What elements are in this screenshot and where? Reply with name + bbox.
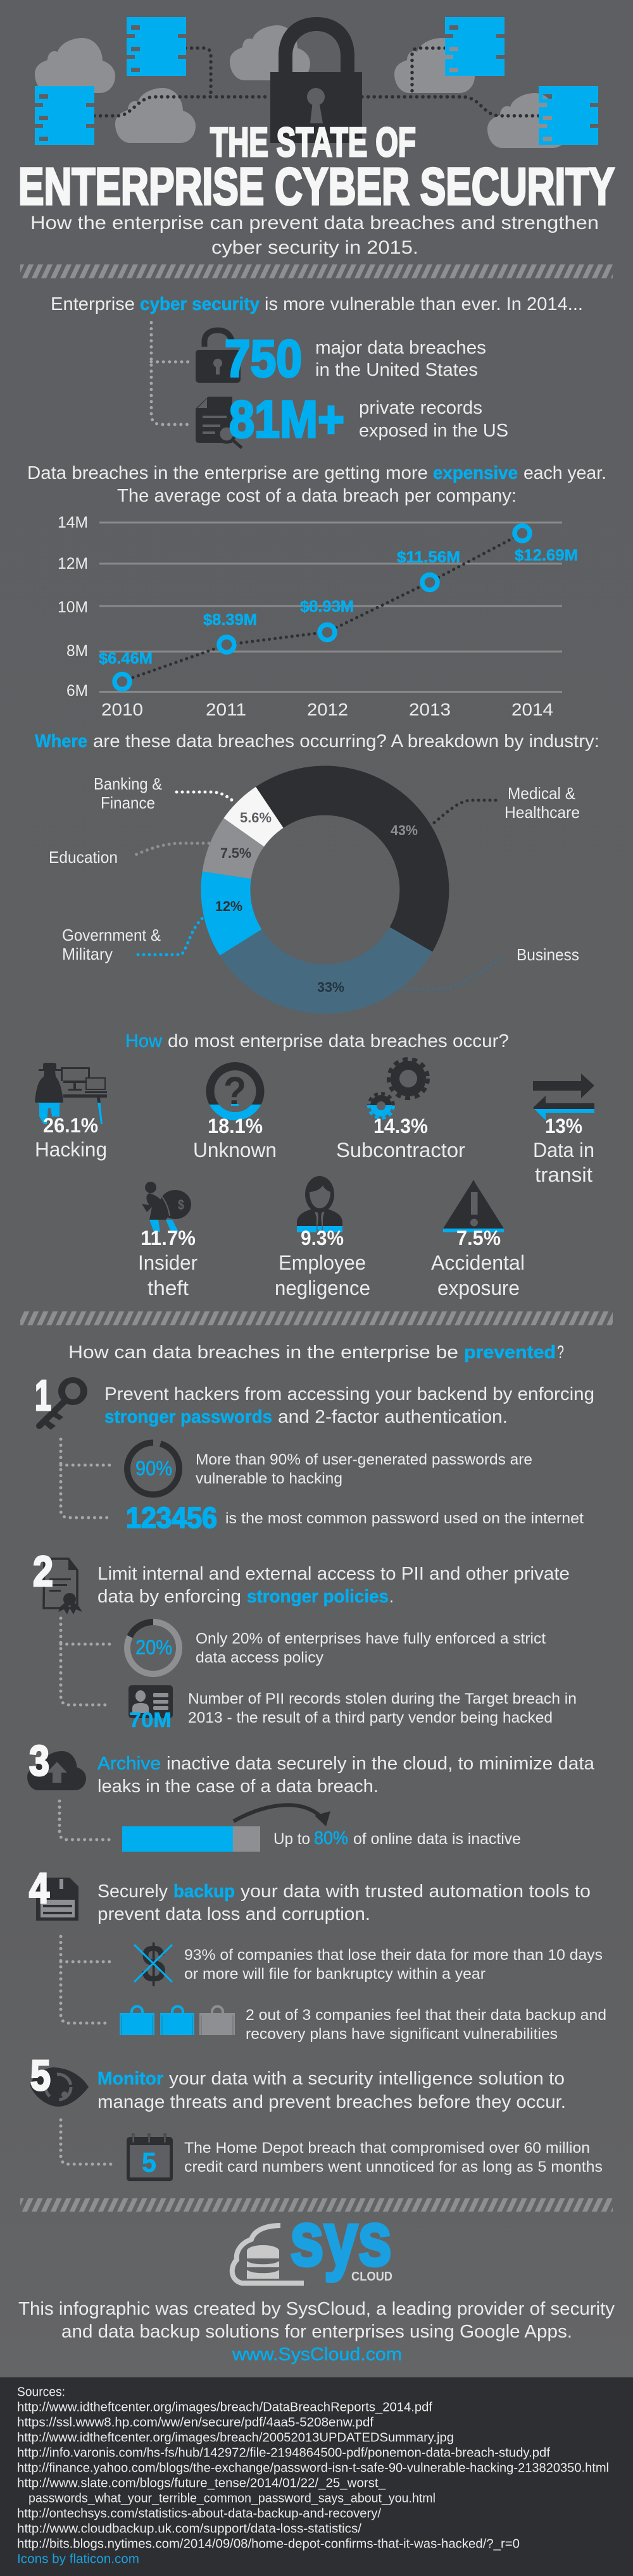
heading: expensive: Data breaches in the enterprise are getting more: [27, 463, 428, 483]
stat: 81M+ records: 81M+: [229, 390, 344, 449]
step number: 2: [33, 1547, 53, 1595]
footer panel: sources: https://ssl.www8.hp.com/ww/en/secure/pdf/4aa5-5208enw.pdf: [17, 2415, 373, 2429]
step 5: monitor: The Home Depot breach that compromised over 60 million: [184, 2139, 590, 2157]
breach type: accidental exposure: Accidental: [431, 1251, 525, 1274]
data line: [122, 533, 522, 681]
step 2: stronger policies: Limit internal and external access to PII and other private: [97, 1564, 570, 1584]
industry labels: Education: [49, 848, 118, 867]
breach type: subcontractor: 14.3%: [373, 1115, 428, 1137]
footer panel: sources: http://www.slate.com/blogs/future_tense/2014/01/22/_25_worst_: [17, 2476, 386, 2490]
step 1: stronger passwords: is the most common password used on the internet: [225, 1510, 584, 1527]
step 2: stronger policies: 2013 - the result of a third party vendor being hacked: [188, 1709, 553, 1726]
heading: vulnerable: cyber security: [140, 294, 260, 314]
step 3: archive: leaks in the case of a data breach.: [97, 1776, 379, 1797]
step number: 3: [29, 1737, 49, 1785]
credit text: and data backup solutions for enterprises using Google Apps.: [61, 2322, 572, 2342]
breach type: unknown: Unknown: [193, 1139, 277, 1161]
icon: two of three briefcases: [120, 2007, 235, 2035]
step 3: archive: inactive data securely in the cloud, to minimize data: [166, 1754, 595, 1774]
heading: vulnerable: is more vulnerable than ever. In 2014...: [265, 294, 583, 314]
icon: calendar: 5: [142, 2147, 156, 2178]
breach type: employee negligence: 9.3%: [301, 1227, 344, 1249]
icon: document with magnifier: [196, 397, 242, 448]
breach type: subcontractor: Subcontractor: [336, 1139, 465, 1161]
breach type: accidental exposure: 7.5%: [456, 1227, 501, 1249]
heading: prevented: prevented: [464, 1342, 556, 1363]
heading: vulnerable: [51, 294, 583, 314]
server racks: [35, 17, 598, 145]
title: [18, 119, 615, 216]
heading: expensive: [27, 463, 606, 506]
step 4: backup: 2 out of 3 companies feel that their data backup and: [246, 2007, 606, 2024]
footer panel: sources: http://www.cloudbackup.uk.com/support/data-loss-statistics/: [17, 2522, 361, 2536]
industry labels: [49, 774, 580, 964]
step 4: backup: your data with trusted automation tools to: [241, 1881, 591, 1902]
step 4: backup: 93% of companies that lose their data for more than 10 days: [184, 1947, 603, 1964]
icon: key: [39, 1377, 87, 1430]
y axis labels: 14M: [58, 514, 88, 531]
icon: open padlock: [196, 330, 241, 383]
icon: floppy disk: [36, 1878, 78, 1921]
x axis labels: [101, 700, 553, 719]
heading: expensive: expensive: [433, 463, 518, 483]
step 1: stronger passwords: stronger passwords: [104, 1407, 272, 1427]
x axis labels: 2010: [101, 700, 143, 719]
progress ring: 90%: [127, 1442, 179, 1494]
step 5: monitor: your data with a security intelligence solution to: [169, 2069, 565, 2089]
step 5: monitor: Monitor: [97, 2069, 163, 2089]
breach type: hacking: [35, 1063, 107, 1161]
industry labels: Business: [517, 945, 579, 964]
line chart: average cost of a breach: [58, 514, 578, 719]
icon: thief with money bag: $: [178, 1197, 184, 1213]
icon: crossed-out dollar: $: [141, 1934, 166, 1993]
dotted connector: [61, 1618, 113, 1705]
step 3: archive: of online data is inactive: [353, 1830, 521, 1848]
stat: 750 breaches: in the United States: [315, 360, 478, 380]
data points: [115, 526, 530, 690]
credit text: www.SysCloud.com: [232, 2344, 402, 2365]
icon: opposing arrows: [533, 1074, 594, 1120]
stat: 750 breaches: [196, 329, 486, 388]
heading: how: How: [125, 1031, 163, 1051]
y axis labels: 6M: [66, 682, 88, 700]
step 3: archive: 80%: [314, 1828, 348, 1848]
step 3: archive: Archive: [97, 1754, 161, 1774]
breach type: employee negligence: Employee: [279, 1251, 366, 1274]
icon: question mark ring: ?: [223, 1068, 246, 1115]
heading: prevented: ?: [557, 1342, 564, 1363]
step 1: stronger passwords: and 2-factor authentication.: [278, 1407, 508, 1427]
heading: expensive: each year.: [523, 463, 606, 483]
subtitle: [30, 213, 599, 258]
x axis labels: 2011: [206, 700, 246, 719]
progress ring: 20%: [127, 1622, 179, 1674]
step 2: stronger policies: [33, 1547, 577, 1731]
breach type: data in transit: 13%: [545, 1115, 582, 1137]
icon: cloud upload: [27, 1751, 86, 1790]
step 4: backup: or more will file for bankruptcy within a year: [184, 1966, 486, 1983]
icon: eye: [30, 2067, 89, 2107]
SysCloud logo: CLOUD: [351, 2270, 392, 2284]
step 2: stronger policies: stronger policies: [247, 1587, 389, 1607]
value labels: $6.46M: [99, 650, 153, 667]
percent labels: 33%: [317, 979, 344, 995]
breach type: employee negligence: negligence: [275, 1277, 370, 1299]
dotted connector: [61, 2120, 114, 2164]
y axis labels: [58, 514, 88, 700]
breach type: unknown: [193, 1062, 277, 1161]
x axis labels: 2014: [511, 700, 553, 719]
footer panel: sources: http://www.idtheftcenter.org/images/breach/20052013UPDATEDSummary.jpg: [17, 2430, 454, 2444]
breach type: accidental exposure: exposure: [437, 1277, 520, 1299]
breach type: data in transit: Data in: [533, 1139, 594, 1161]
icon: employee bust: [297, 1176, 342, 1232]
heading: expensive: The average cost of a data breach per company:: [117, 486, 517, 506]
icon: question mark ring: [206, 1062, 265, 1120]
dotted network connections: [94, 48, 539, 116]
SysCloud logo: [232, 2196, 392, 2284]
footer panel: sources: http://finance.yahoo.com/blogs/the-exchange/password-isn-t-safe-90-vulnerable-hacking-213820350.html: [17, 2461, 609, 2475]
footer panel: sources: Sources:: [17, 2385, 65, 2399]
breach type: hacking: Hacking: [35, 1138, 107, 1161]
step 2: stronger policies: 70M: [129, 1708, 172, 1731]
donut chart: breaches by industry: [49, 766, 580, 1013]
step 4: backup: [29, 1864, 606, 2043]
breach type: data in transit: transit: [535, 1163, 592, 1186]
step 2: stronger policies: Only 20% of enterprises have fully enforced a strict: [196, 1630, 546, 1647]
stat: 81M+ records: [196, 390, 508, 449]
subtitle: cyber security in 2015.: [211, 237, 418, 258]
step 1: stronger passwords: [35, 1372, 594, 1534]
step number: 4: [29, 1864, 49, 1912]
step number: 1: [35, 1372, 51, 1420]
step 4: backup: recovery plans have significant vulnerabilities: [246, 2026, 558, 2043]
icon: certificate document: [44, 1559, 82, 1614]
step 4: backup: Securely: [97, 1881, 168, 1902]
value labels: $8.39M: [203, 611, 257, 629]
clouds: [35, 25, 568, 148]
step 1: stronger passwords: 123456: [126, 1501, 217, 1534]
step 1: stronger passwords: vulnerable to hacking: [196, 1470, 342, 1487]
breach type: subcontractor: [336, 1059, 465, 1161]
callout lines: [134, 792, 505, 989]
icon: ID card: [128, 1685, 173, 1718]
industry labels: Banking &: [94, 774, 162, 793]
y axis labels: 8M: [66, 642, 88, 660]
step 2: stronger policies: .: [389, 1587, 394, 1607]
footer panel: sources: [0, 2377, 633, 2576]
arrow: [234, 1805, 330, 1826]
x axis labels: 2013: [409, 700, 451, 719]
breach type: unknown: 18.1%: [208, 1115, 263, 1137]
progress ring: 20%: 20%: [135, 1636, 172, 1659]
percent labels: 5.6%: [240, 810, 272, 826]
dotted connector: [61, 1439, 113, 1518]
percent labels: 43%: [391, 822, 418, 838]
padlock: [270, 17, 362, 143]
step 4: backup: backup: [173, 1881, 235, 1902]
step 3: archive: [27, 1737, 595, 1852]
icon: gears: [368, 1059, 428, 1118]
step 1: stronger passwords: More than 90% of user-generated passwords are: [196, 1451, 532, 1468]
value labels: $12.69M: [515, 547, 578, 564]
percent labels: [215, 810, 418, 995]
step 1: stronger passwords: Prevent hackers from accessing your backend by enforcing: [104, 1384, 594, 1404]
breach type: insider theft: Insider: [138, 1251, 197, 1274]
step 2: stronger policies: data by enforcing: [97, 1587, 241, 1607]
step 2: stronger policies: Number of PII records stolen during the Target breach in: [188, 1690, 577, 1707]
industry labels: Military: [62, 944, 113, 963]
icon: thief with money bag: [142, 1182, 191, 1232]
value labels: [99, 547, 578, 667]
breach type: insider theft: 11.7%: [141, 1227, 196, 1249]
breach type: insider theft: [138, 1182, 197, 1299]
industry labels: Medical &: [508, 784, 575, 803]
percent labels: 12%: [215, 898, 242, 914]
header illustration: clouds, servers and padlock: [35, 17, 598, 148]
credit text: [18, 2299, 615, 2365]
stat: 81M+ records: exposed in the US: [359, 421, 508, 441]
footer panel: sources: passwords_what_your_terrible_common_password_says_about_you.html: [28, 2491, 436, 2505]
step 5: monitor: manage threats and prevent breaches before they occur.: [97, 2092, 566, 2112]
heading: vulnerable: Enterprise: [51, 294, 135, 314]
industry labels: Healthcare: [505, 803, 580, 822]
breach type: accidental exposure: [431, 1180, 525, 1299]
title: THE STATE OF: [210, 119, 416, 165]
heading: prevented: How can data breaches in the enterprise be: [68, 1342, 458, 1363]
progress ring: 90%: 90%: [135, 1457, 172, 1480]
step number: 5: [30, 2052, 51, 2100]
industry labels: Government &: [62, 926, 161, 944]
heading: where: Where: [35, 731, 87, 752]
stat: 750 breaches: major data breaches: [315, 338, 486, 358]
stat: 750 breaches: 750: [225, 329, 302, 388]
footer panel: sources: http://ontechsys.com/statistics-about-data-backup-and-recovery/: [17, 2506, 381, 2520]
breach type: insider theft: theft: [147, 1277, 189, 1299]
icon: warning triangle: [443, 1180, 504, 1232]
breach type: hacking: 26.1%: [43, 1114, 98, 1137]
step 3: archive: Up to: [273, 1830, 310, 1848]
dotted connector: [60, 1801, 113, 1840]
y axis labels: 10M: [58, 598, 88, 616]
percent labels: 7.5%: [220, 845, 251, 861]
progress bar: 80%: [122, 1826, 260, 1852]
footer panel: sources: http://www.idtheftcenter.org/images/breach/DataBreachReports_2014.pdf: [17, 2400, 432, 2414]
breach type: data in transit: [533, 1074, 594, 1186]
heading: where: are these data breaches occurring? A breakdown by industry:: [93, 731, 599, 752]
step 5: monitor: [30, 2052, 603, 2181]
value labels: $8.93M: [300, 598, 354, 616]
credit text: This infographic was created by SysCloud, a leading provider of security: [18, 2299, 615, 2319]
SysCloud logo: sys: [290, 2196, 392, 2282]
x axis labels: 2012: [307, 700, 348, 719]
step 4: backup: prevent data loss and corruption.: [97, 1904, 370, 1924]
footer panel: sources: http://info.varonis.com/hs-fs/hub/142972/file-2194864500-pdf/ponemon-data-breach-study.pdf: [17, 2446, 550, 2460]
step 5: monitor: credit card numbers went unnoticed for as long as 5 months: [184, 2158, 603, 2176]
stat: 81M+ records: private records: [359, 398, 482, 418]
step 2: stronger policies: data access policy: [196, 1649, 323, 1666]
dotted connector: stats: [151, 323, 192, 424]
y axis labels: 12M: [58, 555, 88, 573]
industry labels: Finance: [101, 793, 155, 812]
footer panel: sources: Icons by flaticon.com: [17, 2552, 139, 2566]
icon: hacker at desk: [35, 1063, 107, 1124]
dotted connector: [61, 1936, 113, 2023]
heading: how: do most enterprise data breaches occur?: [168, 1031, 509, 1051]
value labels: $11.56M: [397, 548, 460, 566]
subtitle: How the enterprise can prevent data breaches and strengthen: [30, 213, 599, 233]
footer panel: sources: http://bits.blogs.nytimes.com/2014/09/08/home-depot-confirms-that-it-was-hacked/?_r=0: [17, 2537, 520, 2551]
breach type: employee negligence: [275, 1176, 370, 1299]
icon: calendar: [127, 2134, 173, 2181]
